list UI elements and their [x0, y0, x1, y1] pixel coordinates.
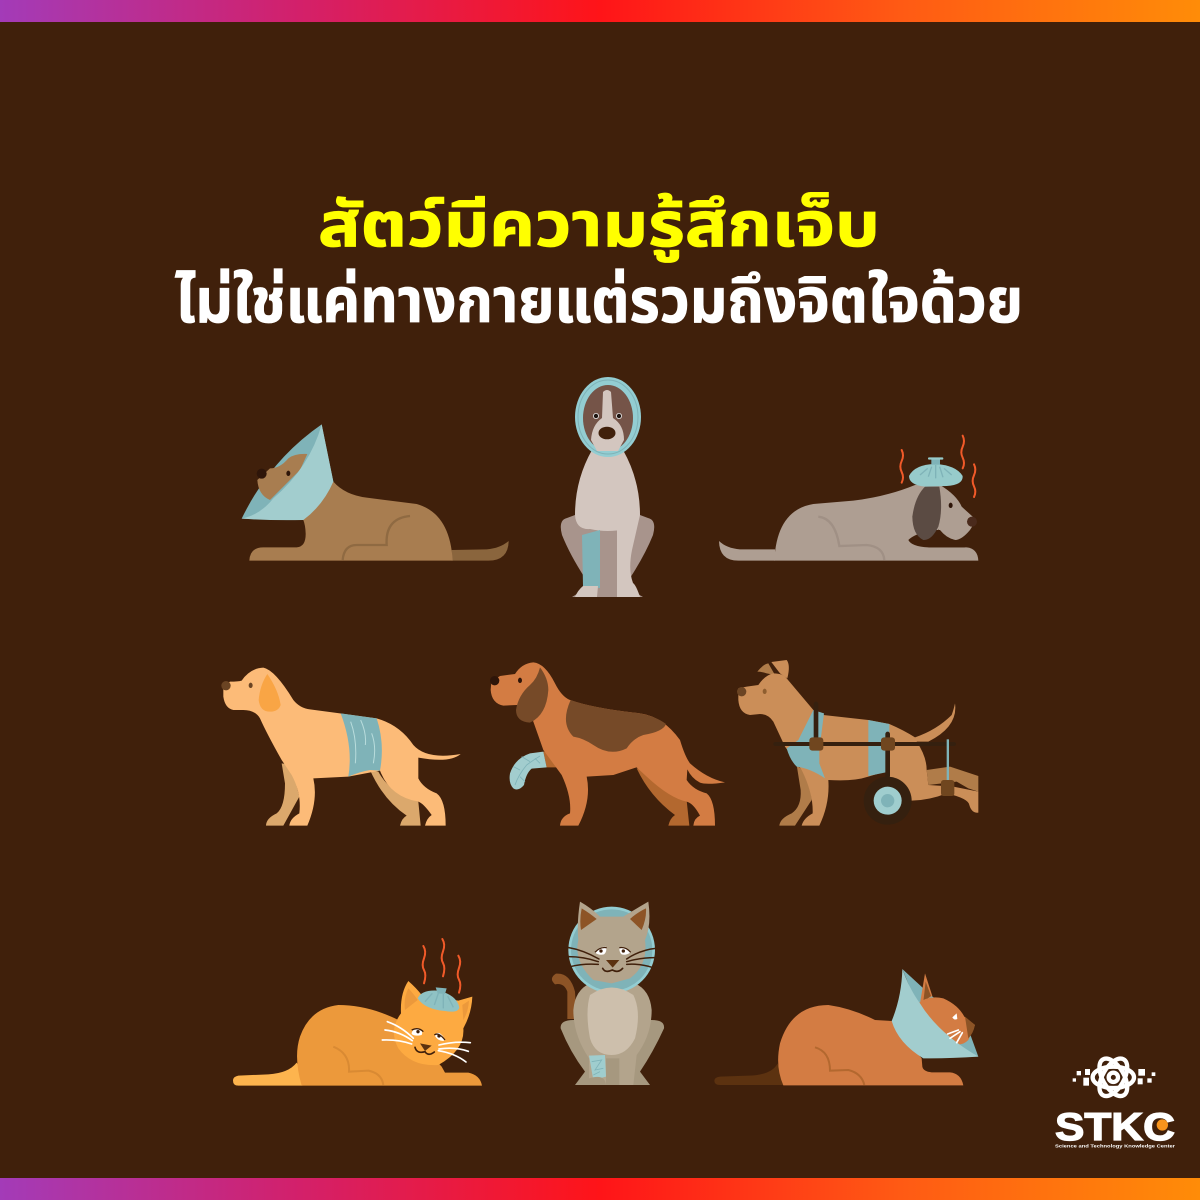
title	[175, 180, 1023, 350]
logo tagline: Science and Technology Knowledge Center	[1055, 1144, 1175, 1150]
bottom gradient bar	[0, 1178, 1200, 1200]
title line 2: ไม่ใช่แค่ทางกายแต่รวมถึงจิตใจด้วย	[175, 256, 1023, 350]
top gradient bar	[0, 0, 1200, 22]
dog with cone lying	[242, 424, 509, 561]
title line 1: สัตว์มีความรู้สึกเจ็บ	[318, 180, 880, 274]
dog with bandaged belly	[221, 668, 461, 826]
grey cat with cone collar	[552, 902, 664, 1085]
dog with leg cast	[490, 662, 725, 826]
orange cat with ice bag	[233, 939, 482, 1086]
logo atom icon	[1093, 1054, 1134, 1101]
orange cat with cone lying	[714, 969, 978, 1085]
dog with cone sitting	[561, 377, 654, 597]
logo wordmark: STKC	[1055, 1105, 1175, 1149]
dog with ice bag lying	[719, 436, 978, 561]
STKC logo	[1055, 1054, 1175, 1150]
dog in wheelchair	[737, 660, 978, 826]
